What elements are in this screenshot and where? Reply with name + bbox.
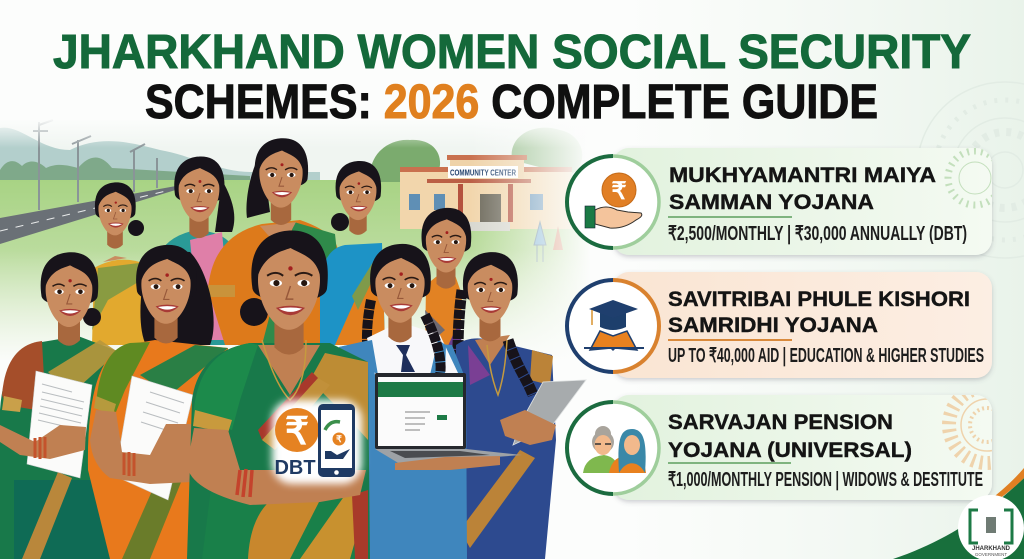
phone: ₹ [336, 434, 342, 444]
title line 1: JHARKHAND WOMEN SOCIAL SECURITY [53, 26, 971, 79]
group of women [0, 138, 586, 559]
title line 2: SCHEMES: 2026 COMPLETE GUIDE [145, 76, 878, 129]
rupee coin: ₹ [285, 411, 309, 453]
community center building [400, 155, 572, 262]
icon ring [567, 156, 659, 248]
green field [0, 180, 590, 360]
heading [669, 164, 936, 214]
heading: SAMMAN YOJANA [669, 191, 874, 214]
laptop showing portal [375, 373, 522, 464]
icon ring [567, 280, 659, 372]
girl: school uniform with laptop [339, 244, 522, 559]
heading [668, 288, 970, 337]
street lights [33, 120, 157, 210]
logo: Jharkhand Government: GOVERNMENT [975, 552, 1007, 557]
background landscape [0, 118, 592, 365]
woman: right, blue sari with tablet [452, 252, 586, 559]
icon: graduation cap on book [584, 300, 644, 350]
woman: back, blue blouse [320, 161, 385, 345]
heading: MUKHYAMANTRI MAIYA [669, 164, 936, 187]
woman: back, orange sari [208, 138, 338, 345]
logo: Jharkhand Government [958, 495, 1024, 559]
decorative mandala top right [917, 82, 1024, 258]
fades [470, 120, 591, 365]
title [53, 26, 971, 129]
tablet [513, 380, 586, 445]
necklace [262, 340, 306, 400]
icon: elderly women [583, 426, 646, 473]
heading [668, 411, 912, 462]
heading: SAMRIDHI YOJANA [668, 314, 878, 337]
hills [0, 128, 320, 185]
heading: SARVAJAN PENSION [668, 411, 893, 434]
woman: front second, orange sari with documents [88, 245, 228, 559]
DBT badge with phone [272, 400, 362, 484]
corner swoosh [893, 468, 1024, 559]
icon: rupee coin over hand: ₹ [611, 178, 627, 205]
road [0, 186, 182, 244]
tree line [0, 157, 250, 184]
woman: center, green sari [187, 231, 370, 559]
arms [187, 428, 366, 505]
building sign [448, 166, 518, 178]
people in the distance [534, 222, 546, 262]
icon: rupee coin over hand [585, 173, 642, 228]
panel: Sarvajan Pension Yojana [567, 387, 1024, 500]
document held by woman [27, 371, 92, 478]
DBT label: DBT [274, 457, 316, 479]
community center building: COMMUNITY CENTER [450, 168, 516, 178]
logo: Jharkhand Government: JHARKHAND [972, 546, 1011, 552]
trees behind building [371, 140, 440, 182]
woman: back, teal and pink sari [158, 157, 234, 345]
woman: back far left, yellow sari [92, 182, 150, 345]
heading: SAVITRIBAI PHULE KISHORI [668, 288, 970, 311]
icon ring [567, 402, 659, 494]
woman: front left, green sari with documents [0, 252, 120, 559]
heading: YOJANA (UNIVERSAL) [668, 439, 912, 462]
document held by woman [115, 376, 193, 500]
panel: Savitribai Phule Kishori Samridhi Yojana [567, 272, 992, 378]
panel: Mukhyamantri Maiya Samman Yojana [567, 148, 1002, 255]
woman: back right, orange and grey sari [422, 208, 471, 350]
